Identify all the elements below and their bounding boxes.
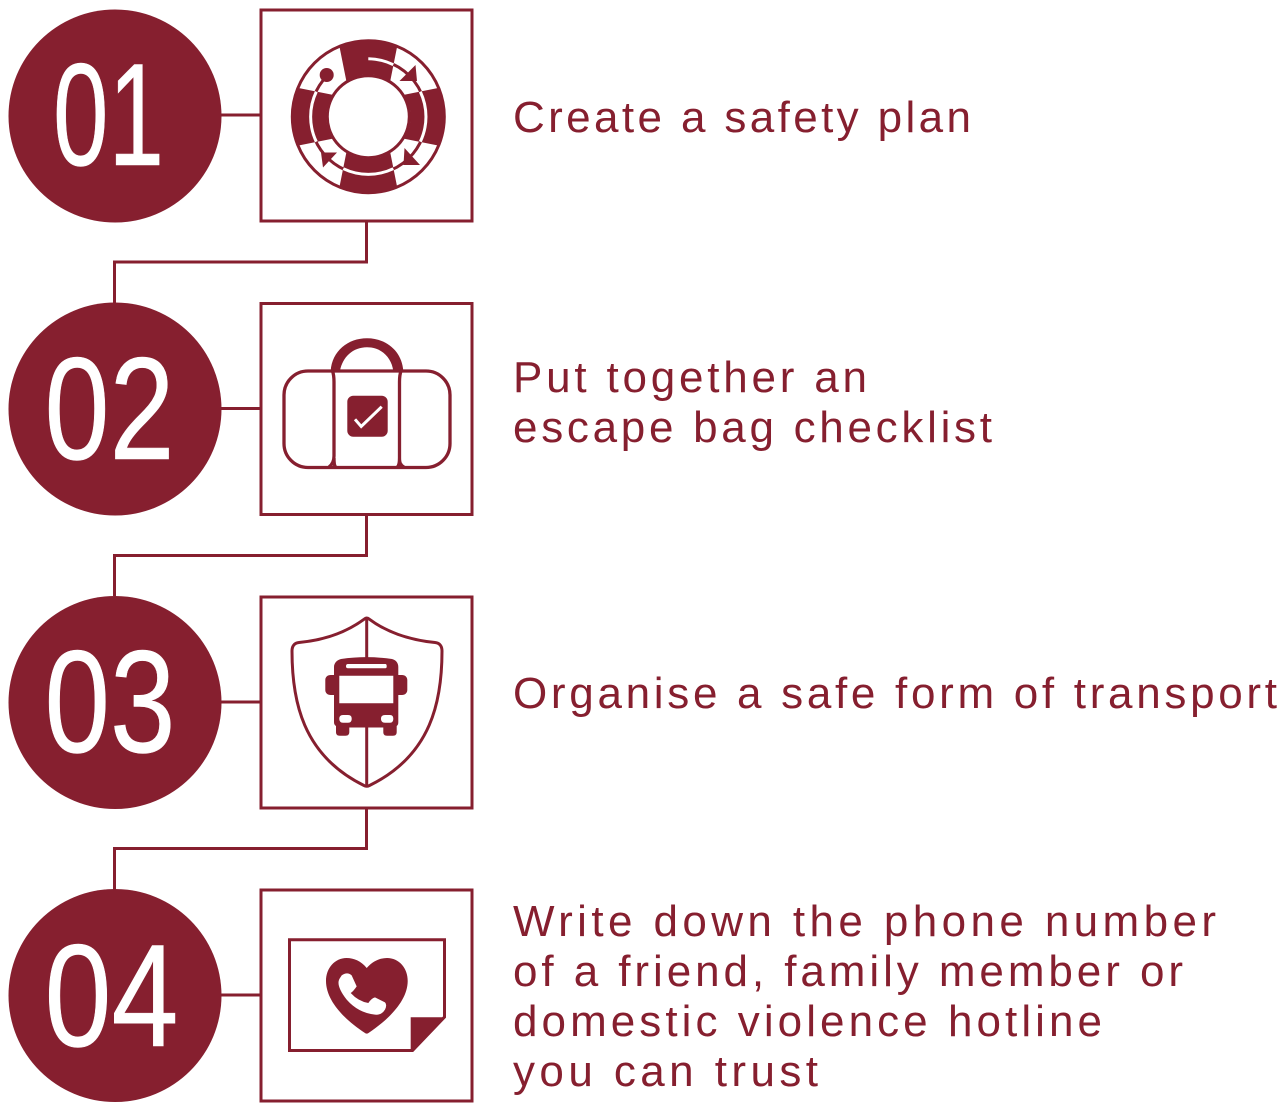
icon box: bag with checkbox: [261, 304, 472, 514]
number circle 03: 03: [44, 620, 176, 783]
number circle 04: [8, 889, 222, 1102]
number circle 04: 04: [44, 914, 178, 1077]
step 4: [8, 889, 1216, 1102]
icon box: note with heart and phone: [261, 890, 472, 1101]
label: create a safety plan: Create a safety plan: [513, 93, 971, 142]
label: escape bag checklist: [513, 353, 992, 452]
label: escape bag checklist: escape bag checklist: [513, 403, 992, 452]
step 2: [8, 302, 992, 516]
label: escape bag checklist: Put together an: [513, 353, 867, 402]
label: write down phone number: [513, 897, 1216, 1096]
connectors between steps: [114, 115, 366, 995]
number circle 03: [8, 596, 222, 809]
number circle 02: [8, 302, 222, 516]
number circle 01: 01: [53, 33, 164, 196]
step 1: [8, 10, 971, 222]
number circle 02: 02: [44, 327, 174, 490]
number circle 01: [8, 10, 222, 222]
label: organise safe transport: Organise a safe form of transport: [513, 669, 1277, 718]
icon box: lifebuoy: [261, 10, 472, 221]
label: write down phone number: domestic violence hotline: [513, 997, 1102, 1046]
label: write down phone number: you can trust: [513, 1047, 818, 1096]
label: write down phone number: of a friend, family member or: [513, 947, 1183, 996]
label: write down phone number: Write down the phone number: [513, 897, 1216, 946]
icon box: shield with bus: [261, 597, 472, 808]
step 3: [8, 596, 1277, 809]
